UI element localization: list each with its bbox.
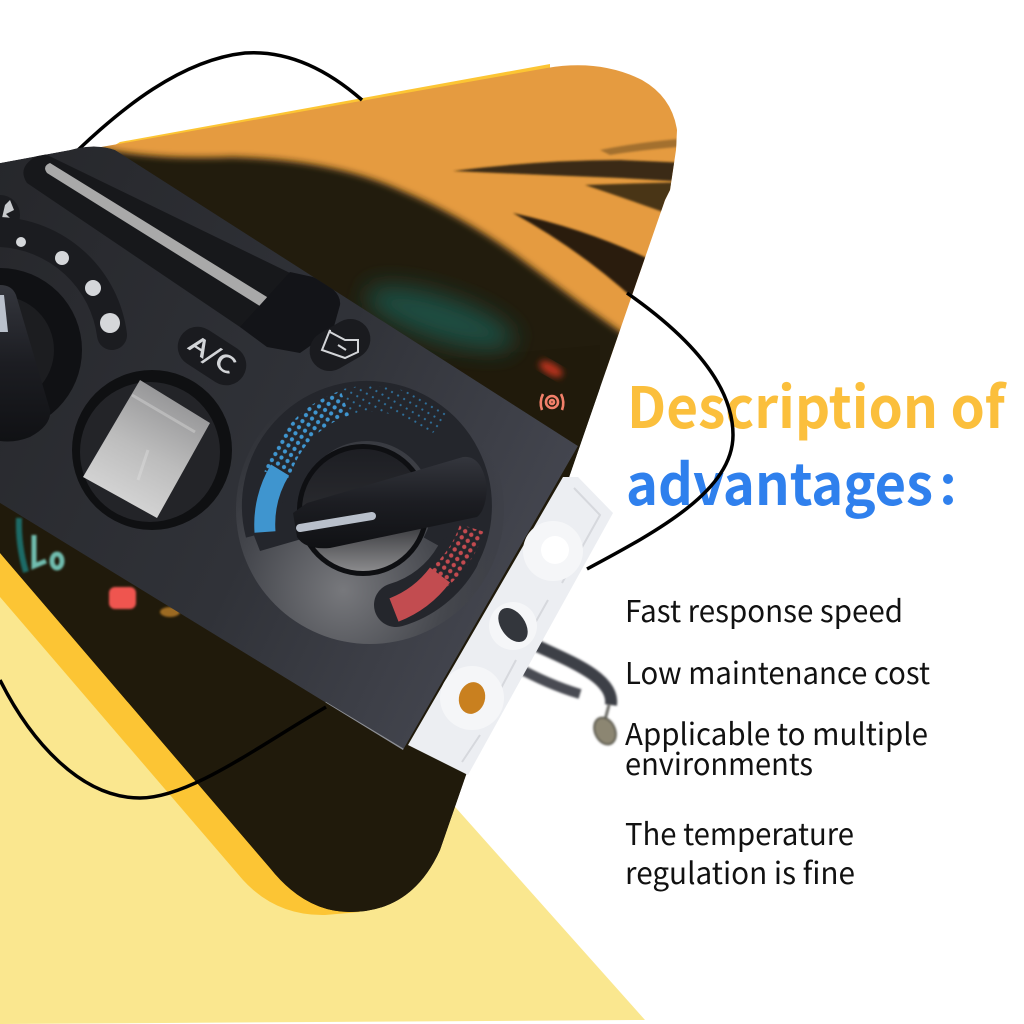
bracket body — [408, 477, 613, 775]
A/C button — [178, 326, 246, 386]
temperature dial face — [246, 411, 462, 605]
photo: teal gauge digits — [19, 518, 62, 572]
photo: dark dashboard silhouette — [0, 145, 622, 912]
photo: amber icon — [160, 607, 180, 617]
center knob cavity — [80, 382, 220, 522]
wire and connector — [515, 640, 620, 748]
advantage: environments: environments — [625, 740, 813, 784]
photo: dark wedge at right edge — [585, 181, 672, 213]
center knob hole — [72, 370, 232, 530]
left knob marker — [0, 295, 8, 332]
advantage: temperature: regulation is fine — [625, 849, 855, 893]
temperature dial recess — [236, 488, 439, 644]
photo: dark wedge between orange arcs — [513, 213, 655, 300]
heading colon — [943, 474, 953, 505]
hole: orange — [455, 679, 489, 717]
advantage: environments — [625, 710, 928, 784]
slider light bar — [45, 163, 267, 308]
dial hub ring — [297, 444, 429, 576]
black outline curve: top — [78, 53, 362, 150]
dial pointer — [293, 457, 487, 548]
advantage: cost: Low maintenance cost — [625, 649, 930, 693]
gold offset shadow shape — [0, 64, 550, 915]
recirculation button — [310, 319, 370, 371]
slider slot — [24, 154, 290, 327]
speed dot band — [0, 232, 112, 335]
fan button — [0, 195, 20, 219]
hole: white — [541, 536, 569, 564]
climate control panel — [0, 146, 578, 750]
left knob pointer — [0, 285, 50, 442]
dashboard photo triangle — [0, 50, 700, 950]
left knob recess — [0, 268, 82, 415]
photo: teal instrument glow — [359, 273, 521, 363]
photo: shadow stripe top right — [600, 138, 676, 156]
slider handle — [240, 272, 340, 353]
wire terminal lead — [605, 705, 609, 720]
photo: red warning icon — [109, 587, 136, 609]
wire terminal — [590, 714, 620, 748]
black outline curve: bottom left — [0, 680, 326, 798]
panel bottom edge highlight — [325, 703, 403, 750]
heading — [626, 363, 1008, 522]
advantage: temperature — [625, 810, 855, 893]
fan icon — [2, 200, 14, 218]
blue scale dots — [277, 403, 345, 475]
panel body — [0, 146, 578, 750]
advantage: speed: Fast response speed — [625, 587, 903, 631]
silver reflective square — [83, 380, 210, 518]
photo: dark wedge upper right — [453, 160, 690, 182]
black outline curve: right — [587, 293, 733, 569]
recirculation icon — [322, 330, 358, 358]
red scale dots — [438, 528, 472, 578]
dial pointer marker — [300, 516, 372, 528]
photo: brake warning icon — [541, 394, 563, 410]
A/C pill — [178, 326, 246, 386]
bracket washers — [523, 521, 583, 581]
photo: orange windshield area — [102, 65, 677, 370]
white connector bracket — [408, 477, 613, 775]
pale yellow triangle background — [0, 597, 645, 1024]
red scale solid — [394, 575, 440, 610]
A/C label: A/C — [183, 326, 244, 381]
recirculation pill — [310, 319, 370, 371]
hole: dark wire — [492, 603, 534, 647]
dial hub — [302, 449, 424, 571]
speed dots — [16, 237, 120, 333]
photo: red glow — [537, 357, 565, 381]
blue scale fade dots — [345, 399, 440, 425]
heading line 1: Description of — [627, 363, 1008, 445]
blue scale solid — [265, 470, 280, 532]
advantage: temperature: The temperature — [625, 810, 854, 854]
heading line 2: advantages — [626, 440, 933, 522]
wire loop — [525, 640, 611, 705]
left knob hub — [18, 299, 54, 383]
advantage: environments: Applicable to multiple — [625, 710, 928, 754]
advantages list — [625, 587, 930, 893]
photo: lower dark fill — [0, 388, 600, 912]
